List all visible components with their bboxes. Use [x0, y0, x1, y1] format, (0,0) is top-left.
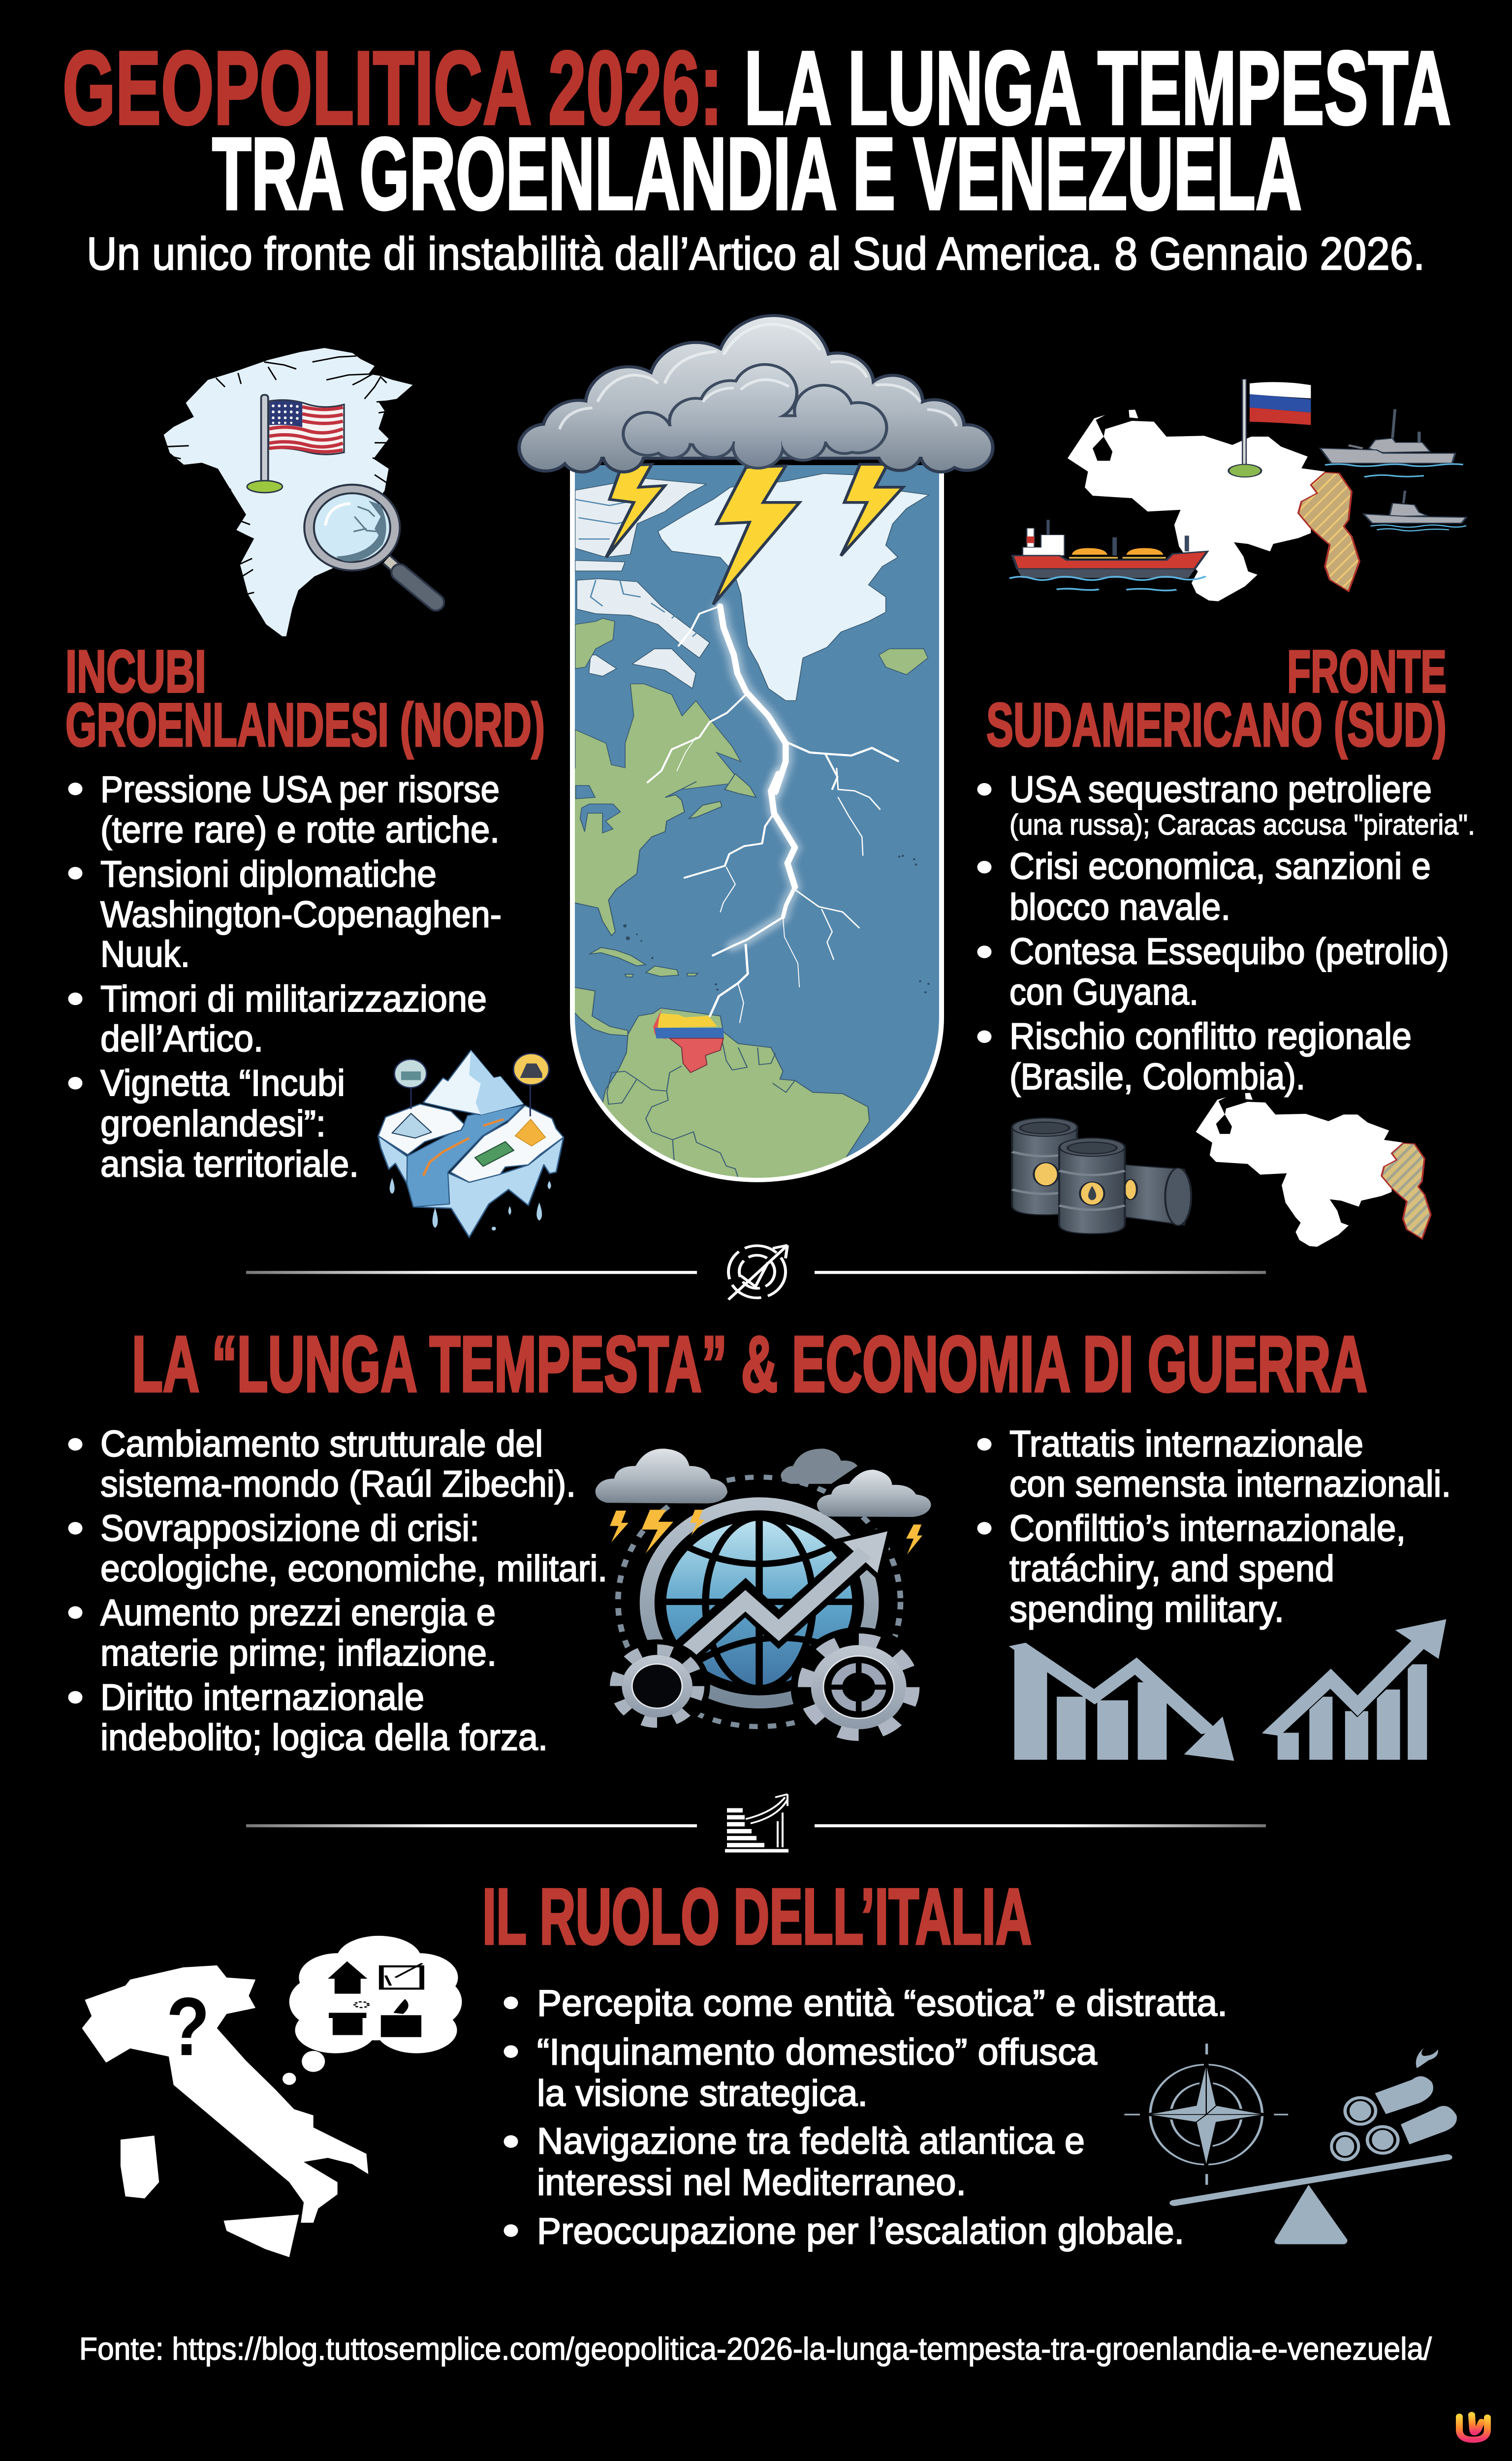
- pins: [394, 1054, 549, 1116]
- bullet list: north: Vignetta “Incubi: [100, 1062, 345, 1104]
- globe: [662, 1517, 856, 1688]
- small bolts: [610, 1510, 922, 1554]
- bullet list: Italy: Navigazione tra fedeltà atlantica e: [537, 2120, 1085, 2162]
- bullet list: crisis left: Cambiamento strutturale del: [100, 1423, 543, 1464]
- front cloud: [625, 366, 885, 467]
- chart: rising bars: [1271, 1619, 1447, 1760]
- icon: Italy map with question mark: [82, 1965, 368, 2257]
- divider with compass arrow icon: [246, 1245, 1266, 1299]
- bullet list: south: USA sequestrano petroliere: [1009, 768, 1432, 810]
- bullet list: crisis right: tratáchiry, and spend: [1009, 1547, 1334, 1589]
- icon: NATO star and oil barrels on a balance: [1124, 2044, 1458, 2244]
- bullet list: north: Nuuk.: [100, 933, 190, 975]
- heading: Incubi groenlandesi: [65, 637, 545, 759]
- warship 1: [1320, 409, 1463, 477]
- bullet list: crisis left: ecologiche, economiche, militari.: [100, 1547, 607, 1589]
- icon: Venezuela map with Russian flag, tanker and warships: [1009, 379, 1466, 601]
- heading: Fronte sudamericano: [986, 637, 1447, 759]
- bullet list: north: [68, 768, 502, 1184]
- central map capsule: [571, 465, 942, 1195]
- icon: thought bubble with domestic concerns: [283, 1936, 462, 2085]
- icon: oil barrels: [1012, 1118, 1191, 1233]
- bullet list: Italy: Percepita come entità “esotica” e distratta.: [537, 1982, 1228, 2024]
- bullet list: crisis right: Trattatis internazionale: [1009, 1423, 1363, 1464]
- bullet list: north: Washington-Copenaghen-: [100, 893, 502, 935]
- warship 2: [1363, 491, 1466, 531]
- small clouds: [596, 1449, 931, 1517]
- bullet list: south: blocco navale.: [1009, 886, 1230, 928]
- bullet list: north: (terre rare) e rotte artiche.: [100, 809, 500, 850]
- bullet list: south: Crisi economica, sanzioni e: [1009, 845, 1431, 887]
- bullet list: south: [977, 768, 1475, 1097]
- bullet list: south: Rischio conflitto regionale: [1009, 1015, 1412, 1057]
- icon: Greenland map with US flag and magnifying glass: [164, 348, 436, 636]
- bullet list: south: con Guyana.: [1009, 971, 1198, 1012]
- tanker ship: [1009, 520, 1207, 591]
- chart: falling bars: [1014, 1639, 1234, 1761]
- bullet list: crisis left: [68, 1423, 607, 1758]
- bullet list: crisis left: Sovrapposizione di crisi:: [100, 1507, 479, 1548]
- bullet list: crisis left: indebolito; logica della forza.: [100, 1716, 548, 1758]
- bullet list: Italy: interessi nel Mediterraneo.: [537, 2161, 966, 2203]
- bullet list: north: ansia territoriale.: [100, 1143, 359, 1184]
- lightning strike: [648, 606, 898, 1023]
- magnifying glass: [304, 485, 436, 602]
- bullet list: north: Tensioni diplomatiche: [100, 853, 437, 894]
- logo: [1459, 2415, 1487, 2440]
- title: [63, 30, 1451, 231]
- Russian flag: [1228, 379, 1311, 477]
- bullet list: Italy: “Inquinamento domestico” offusca: [537, 2031, 1097, 2073]
- US flag: [247, 395, 344, 493]
- title: GEOPOLITICA 2026:: [63, 30, 723, 146]
- heading: Il ruolo dell'Italia: IL RUOLO DELL’ITALIA: [482, 1873, 1032, 1961]
- bullet list: south: (Brasile, Colombia).: [1009, 1056, 1305, 1097]
- bullet list: north: groenlandesi”:: [100, 1103, 326, 1144]
- bullet list: north: dell’Artico.: [100, 1018, 263, 1059]
- back cloud: [521, 317, 991, 471]
- bullet list: crisis left: materie prime; inflazione.: [100, 1632, 497, 1673]
- yellow bolts: [606, 464, 903, 604]
- heading: Incubi groenlandesi: GROENLANDESI (NORD): [65, 691, 545, 759]
- icon: Venezuela map with Essequibo: [1196, 1093, 1431, 1247]
- divider with chart icon: [246, 1794, 1266, 1853]
- bullet list: north: Timori di militarizzazione: [100, 978, 487, 1019]
- heading: Incubi groenlandesi: INCUBI: [65, 637, 206, 705]
- seesaw: [1174, 2157, 1448, 2203]
- icon: globe, rising arrow, gears and storm clouds: [596, 1449, 931, 1747]
- bullet list: Italy: Preoccupazione per l’escalation globale.: [537, 2210, 1184, 2251]
- bullet list: crisis right: spending military.: [1009, 1588, 1284, 1630]
- bullet list: north: Pressione USA per risorse: [100, 768, 500, 810]
- icon: storm clouds with yellow lightning bolts: [521, 317, 991, 604]
- bullet list: Italy: [504, 1982, 1228, 2251]
- ocean and land masses: [571, 465, 942, 1195]
- bullet list: crisis right: Confilttio’s internazionale,: [1009, 1507, 1406, 1548]
- icon: Italy map with question mark: ?: [166, 1981, 210, 2073]
- bullet list: crisis left: Diritto internazionale: [100, 1676, 424, 1718]
- bullet list: Italy: la visione strategica.: [537, 2072, 868, 2114]
- bullet list: crisis right: [977, 1423, 1451, 1630]
- NATO compass: [1124, 2044, 1288, 2185]
- bullet list: crisis left: Aumento prezzi energia e: [100, 1592, 496, 1633]
- rising arrow: [686, 1528, 891, 1651]
- bullet list: crisis left: sistema-mondo (Raúl Zibechi).: [100, 1463, 576, 1504]
- icon: melting iceberg: [378, 1050, 564, 1237]
- capsule border: [572, 465, 942, 1180]
- gear left: [604, 1640, 710, 1733]
- gear right: [791, 1627, 927, 1747]
- oil barrels: [1328, 2075, 1458, 2162]
